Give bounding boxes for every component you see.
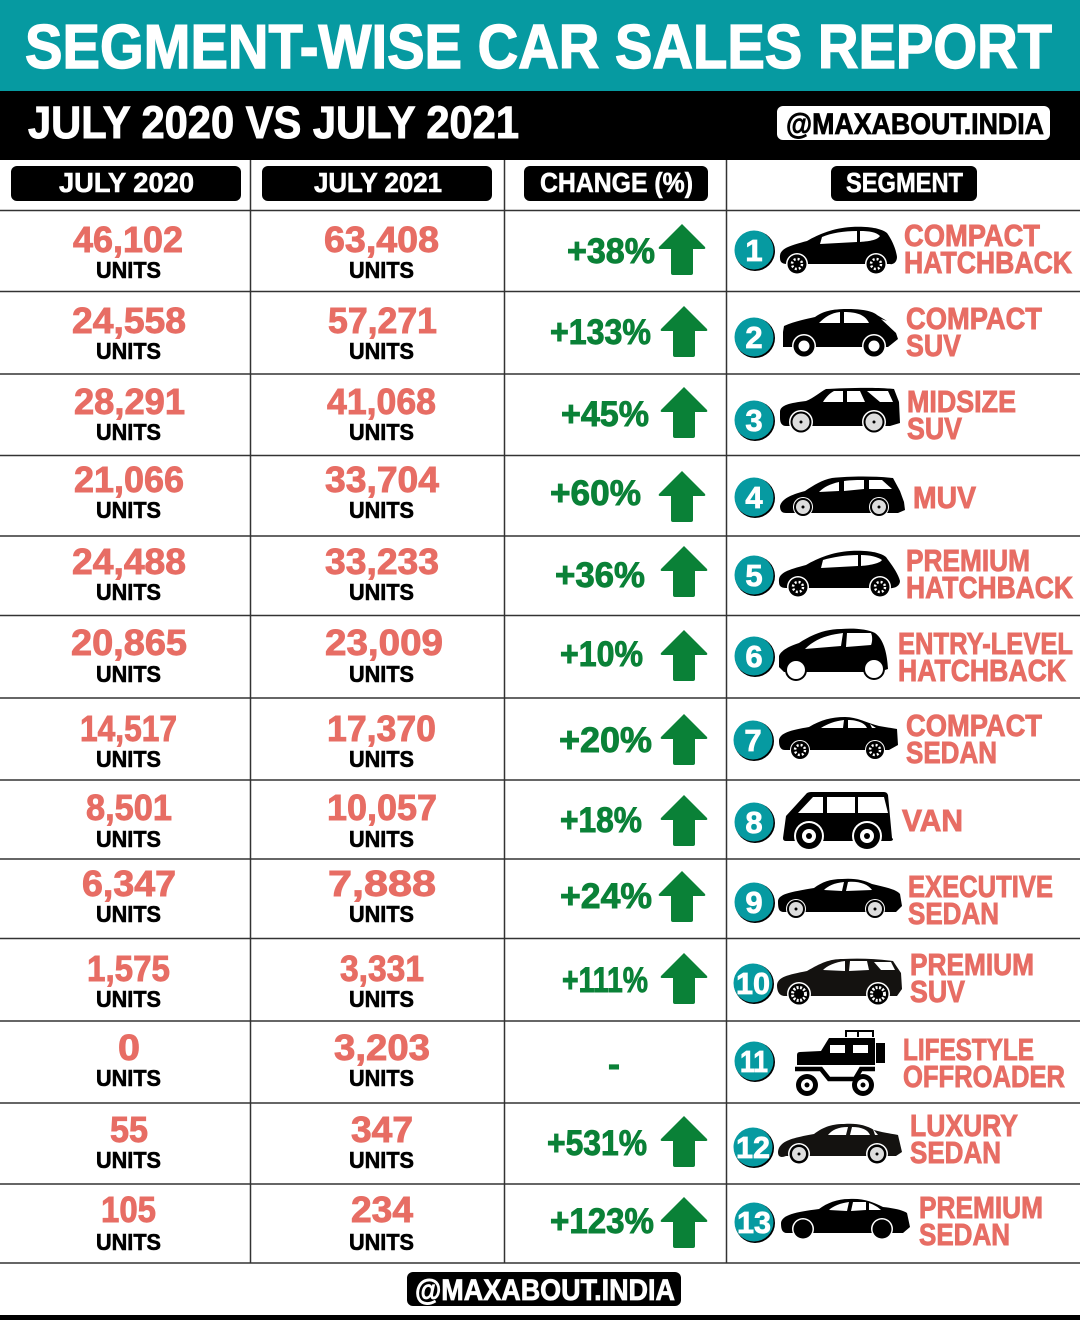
segment label	[907, 384, 1016, 446]
units: UNITS	[349, 826, 414, 852]
segment label: SUV	[906, 328, 961, 363]
units: UNITS	[96, 826, 161, 852]
number badge: 13	[737, 1205, 771, 1240]
icon: up arrow	[661, 387, 707, 438]
number badge	[734, 478, 775, 518]
handle badge: @MAXABOUT.INDIA	[786, 108, 1044, 141]
segment label	[903, 1032, 1065, 1094]
icon: up arrow	[661, 546, 707, 597]
icon: car	[780, 476, 905, 517]
July 2020 value: 24,488	[72, 541, 186, 582]
number badge: 3	[745, 403, 763, 438]
segment label: COMPACT	[906, 301, 1042, 336]
column header: July 2020: JULY 2020	[59, 167, 194, 198]
icon: up arrow	[659, 871, 705, 922]
row 6: entry-level hatchback	[71, 622, 1073, 688]
July 2021 value: 17,370	[327, 708, 436, 749]
units: UNITS	[96, 986, 161, 1012]
number badge: 5	[745, 558, 763, 593]
segment label: MIDSIZE	[907, 384, 1016, 419]
July 2021 value: 234	[351, 1189, 413, 1230]
July 2021 value: 10,057	[327, 787, 437, 828]
number badge: 4	[745, 480, 763, 515]
column header: July 2020	[11, 166, 241, 201]
row 7: compact sedan	[80, 708, 1042, 772]
number badge	[734, 400, 775, 441]
units: UNITS	[96, 579, 161, 605]
July 2020 value: 8,501	[86, 787, 172, 828]
units: UNITS	[349, 1229, 414, 1255]
units: UNITS	[96, 257, 161, 283]
units: UNITS	[349, 497, 414, 523]
units: UNITS	[96, 1229, 161, 1255]
icon: up arrow	[661, 1116, 707, 1167]
segment label: PREMIUM	[919, 1190, 1043, 1225]
units: UNITS	[96, 497, 161, 523]
icon: car	[781, 1199, 910, 1240]
number badge	[734, 636, 775, 677]
change: +24%	[560, 877, 652, 916]
units: UNITS	[96, 338, 161, 364]
number badge	[734, 802, 775, 843]
icon: car	[780, 227, 897, 275]
change: +20%	[559, 721, 652, 760]
July 2021 value: 57,271	[328, 300, 437, 341]
change: +60%	[550, 474, 641, 513]
column header: July 2021	[262, 166, 492, 201]
units: UNITS	[349, 746, 414, 772]
number badge: 2	[745, 320, 763, 355]
July 2021 value: 7,888	[328, 863, 436, 904]
segment label: SEDAN	[908, 896, 999, 931]
icon: car	[780, 388, 900, 434]
units: UNITS	[349, 661, 414, 687]
units: UNITS	[349, 1065, 414, 1091]
segment label: VAN	[902, 803, 963, 838]
units: UNITS	[96, 1147, 161, 1173]
icon: up arrow	[661, 306, 707, 357]
July 2020 value: 0	[118, 1027, 140, 1068]
July 2020 value: 105	[101, 1189, 156, 1230]
segment label: LIFESTYLE	[903, 1032, 1034, 1067]
subtitle bar	[0, 91, 1080, 160]
units: UNITS	[96, 1065, 161, 1091]
units: UNITS	[96, 746, 161, 772]
segment label: MUV	[913, 480, 976, 515]
segment label: LUXURY	[910, 1108, 1018, 1143]
July 2021 value: 41,068	[327, 381, 436, 422]
July 2021 value: 63,408	[324, 219, 439, 260]
row 10: premium SUV	[87, 947, 1034, 1012]
segment label: SUV	[907, 411, 962, 446]
icon: up arrow	[659, 471, 705, 522]
icon: van	[783, 792, 893, 851]
number badge	[734, 556, 775, 596]
change: +36%	[555, 556, 645, 595]
July 2020 value: 1,575	[87, 948, 170, 989]
icon: car	[777, 959, 902, 1006]
number badge: 1	[745, 233, 763, 268]
change: +123%	[550, 1202, 654, 1241]
change: none: -	[608, 1045, 620, 1084]
units: UNITS	[349, 338, 414, 364]
segment label	[906, 301, 1042, 363]
July 2021 value: 347	[351, 1109, 413, 1150]
segment label	[906, 708, 1042, 770]
icon: car	[779, 717, 898, 760]
segment label: PREMIUM	[906, 543, 1030, 578]
column header: segment: SEGMENT	[846, 167, 963, 198]
segment label: SEDAN	[910, 1135, 1001, 1170]
row 1: compact hatchback	[73, 218, 1073, 283]
segment label	[910, 1108, 1018, 1170]
row 3: midsize SUV	[74, 381, 1016, 446]
segment label	[908, 869, 1053, 931]
change: +10%	[560, 635, 643, 674]
number badge	[734, 720, 774, 761]
segment label: SUV	[910, 974, 965, 1009]
units: UNITS	[96, 419, 161, 445]
units: UNITS	[96, 901, 161, 927]
number badge	[734, 1042, 775, 1082]
change: +531%	[547, 1124, 647, 1163]
July 2021 value: 3,203	[334, 1027, 430, 1068]
number badge: 10	[736, 966, 770, 1001]
segment label: SEDAN	[906, 735, 997, 770]
July 2020 value: 20,865	[71, 622, 187, 663]
July 2020 value: 55	[110, 1109, 148, 1150]
icon: up arrow	[659, 224, 705, 275]
column header: July 2021: JULY 2021	[314, 167, 442, 198]
July 2021 value: 33,704	[325, 459, 439, 500]
change: +38%	[567, 232, 655, 271]
units: UNITS	[349, 419, 414, 445]
number badge: 9	[745, 885, 763, 920]
title banner	[0, 0, 1080, 91]
icon: up arrow	[661, 1197, 707, 1248]
icon: car	[783, 309, 898, 358]
row 13: premium sedan	[96, 1189, 1043, 1255]
segment label	[910, 947, 1034, 1009]
footer handle badge: @MAXABOUT.INDIA	[415, 1274, 675, 1307]
segment label: PREMIUM	[910, 947, 1034, 982]
number badge: 11	[740, 1044, 768, 1079]
column header: change: CHANGE (%)	[540, 167, 693, 198]
icon: up arrow	[661, 953, 707, 1004]
icon: up arrow	[661, 795, 707, 846]
icon: car	[779, 551, 900, 598]
change: +133%	[550, 313, 651, 352]
July 2020 value: 24,558	[72, 300, 186, 341]
July 2021 value: 3,331	[340, 948, 424, 989]
July 2021 value: 33,233	[325, 541, 439, 582]
number badge	[734, 230, 775, 271]
icon: car	[779, 629, 888, 681]
row 4: MUV	[74, 459, 976, 523]
units: UNITS	[96, 661, 161, 687]
number badge	[734, 318, 775, 358]
units: UNITS	[349, 986, 414, 1012]
subtitle: JULY 2020 VS JULY 2021	[28, 97, 519, 148]
row 5: premium hatchback	[72, 541, 1074, 605]
number badge: 8	[745, 805, 763, 840]
segment label	[919, 1190, 1043, 1252]
icon: jeep	[795, 1031, 885, 1096]
row 8: van	[86, 787, 963, 852]
units: UNITS	[349, 901, 414, 927]
units: UNITS	[349, 579, 414, 605]
change: +45%	[561, 395, 649, 434]
bottom bar	[0, 1315, 1080, 1320]
segment label: COMPACT	[904, 218, 1040, 253]
July 2021 value: 23,009	[325, 622, 443, 663]
units: UNITS	[349, 1147, 414, 1173]
row 9: executive sedan	[82, 863, 1053, 931]
row 12: luxury sedan	[96, 1108, 1018, 1173]
July 2020 value: 46,102	[73, 219, 183, 260]
July 2020 value: 21,066	[74, 459, 184, 500]
number badge	[734, 882, 775, 923]
segment label: SEDAN	[919, 1217, 1010, 1252]
icon: up arrow	[661, 630, 707, 681]
icon: up arrow	[661, 714, 707, 765]
segment label	[904, 218, 1073, 280]
number badge: 7	[744, 723, 762, 758]
icon: car	[778, 879, 902, 919]
July 2020 value: 28,291	[74, 381, 185, 422]
table header	[11, 166, 977, 201]
row 2: compact SUV	[72, 300, 1042, 364]
segment label: COMPACT	[906, 708, 1042, 743]
change: +111%	[562, 961, 648, 1000]
segment label	[898, 626, 1073, 688]
row 11: lifestyle offroader	[96, 1027, 1065, 1096]
icon: car	[778, 1124, 902, 1165]
number badge: 6	[745, 639, 763, 674]
segment label: EXECUTIVE	[908, 869, 1053, 904]
units: UNITS	[349, 257, 414, 283]
change: +18%	[560, 801, 642, 840]
July 2020 value: 6,347	[82, 863, 176, 904]
segment label	[906, 543, 1074, 605]
July 2020 value: 14,517	[80, 708, 177, 749]
number badge: 12	[736, 1130, 770, 1165]
